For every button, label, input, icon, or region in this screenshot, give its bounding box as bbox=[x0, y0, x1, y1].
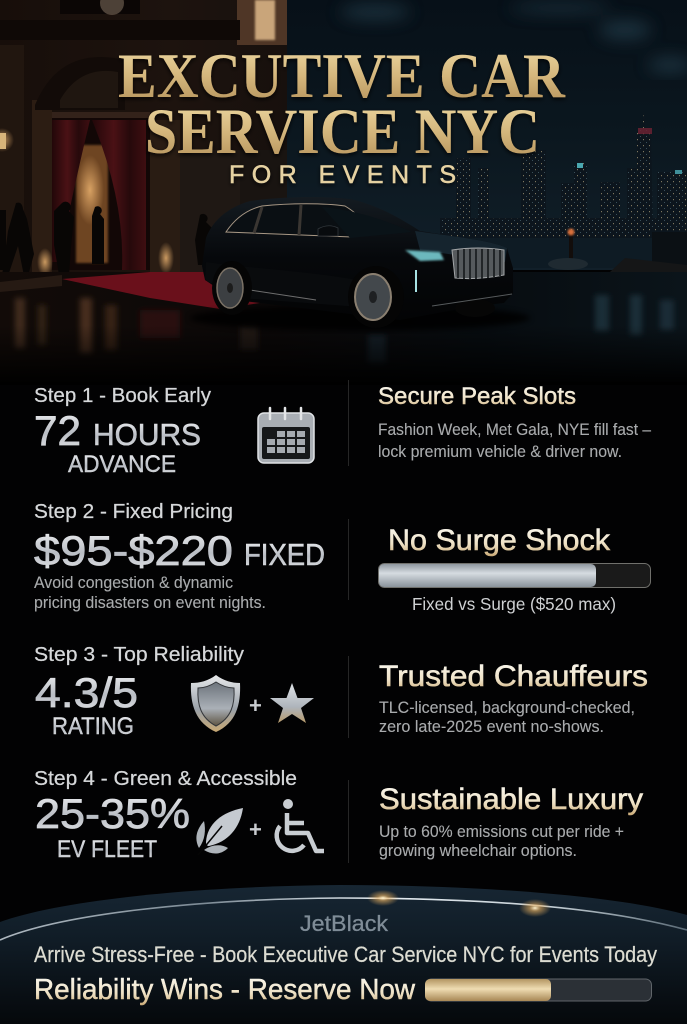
step 2 description bbox=[34, 574, 266, 612]
heading: trusted chauffeurs: Trusted Chauffeurs bbox=[379, 660, 648, 693]
stat: 4.3/5 rating: 4.3/5 bbox=[35, 669, 138, 716]
stat: EV fleet: EV FLEET bbox=[57, 836, 157, 863]
step 3 description: zero late-2025 event no-shows. bbox=[379, 718, 604, 736]
panel: step 3 bbox=[34, 643, 648, 740]
footer: car roof call to action bbox=[0, 885, 687, 1024]
plus sign: + bbox=[249, 817, 262, 842]
harbor water bbox=[470, 238, 687, 268]
step 2 description: pricing disasters on event nights. bbox=[34, 594, 266, 612]
red curtains and lit doorway bbox=[52, 118, 150, 270]
plus sign: + bbox=[249, 693, 262, 718]
icon: leaf bbox=[196, 808, 243, 855]
front bumper trim bbox=[432, 294, 512, 306]
step 2 heading: Step 2 - Fixed Pricing bbox=[34, 500, 233, 523]
stat: EV fleet: 25-35% bbox=[35, 790, 190, 837]
title line 3: FOR EVENTS bbox=[229, 161, 458, 189]
stat: 72 hours advance: ADVANCE bbox=[68, 451, 176, 478]
car roof bbox=[0, 885, 687, 1024]
wet street bbox=[0, 272, 687, 382]
title line 2: SERVICE NYC bbox=[145, 96, 540, 168]
stat: 4.3/5 rating bbox=[35, 669, 138, 740]
title bbox=[118, 41, 566, 189]
side mirror bbox=[318, 226, 338, 236]
title line 1: EXCUTIVE CAR bbox=[118, 41, 566, 111]
icon: star bbox=[270, 683, 314, 723]
step 3 description bbox=[379, 699, 635, 736]
red carpet bbox=[62, 272, 280, 309]
reserve line: Reliability Wins - Reserve Now bbox=[34, 974, 416, 1006]
step 4 heading: Step 4 - Green & Accessible bbox=[34, 767, 297, 790]
step 3 heading: Step 3 - Top Reliability bbox=[34, 643, 245, 666]
step 4 description: Up to 60% emissions cut per ride + bbox=[379, 823, 624, 841]
stat: fixed price range: $95-$220 bbox=[34, 527, 233, 574]
icon: shield bbox=[191, 675, 240, 732]
front wheel bbox=[348, 266, 404, 328]
bar: reserve progress bbox=[425, 979, 652, 1001]
guests bbox=[0, 202, 214, 276]
grille bbox=[452, 248, 504, 279]
step 2 description: Avoid congestion & dynamic bbox=[34, 574, 233, 592]
bar caption: Fixed vs Surge ($520 max) bbox=[412, 594, 616, 614]
step 1 description: Fashion Week, Met Gala, NYE fill fast – bbox=[378, 421, 652, 439]
stat: 72 hours advance bbox=[34, 407, 201, 478]
icon: wheelchair bbox=[277, 799, 324, 851]
heading: sustainable luxury: Sustainable Luxury bbox=[379, 783, 643, 816]
bar: fixed vs surge bbox=[378, 564, 650, 588]
heading: secure peak slots: Secure Peak Slots bbox=[378, 383, 576, 410]
step 1 description bbox=[378, 421, 652, 461]
stat: EV fleet bbox=[35, 790, 190, 863]
panel: step 2 bbox=[34, 500, 650, 614]
building facade bbox=[0, 0, 287, 280]
step 4 description: growing wheelchair options. bbox=[379, 842, 577, 860]
car windows bbox=[226, 204, 412, 300]
city skyline bbox=[440, 110, 687, 242]
step 1 heading: Step 1 - Book Early bbox=[34, 384, 212, 407]
street reflections bbox=[15, 295, 674, 363]
wall lamps and glow bbox=[0, 128, 174, 276]
hero photo: event venue and skyline bbox=[0, 0, 687, 385]
headlight bbox=[405, 250, 444, 292]
stat: fixed price range bbox=[34, 527, 325, 574]
stat: 72 hours advance: HOURS bbox=[93, 417, 201, 452]
black SUV bbox=[190, 197, 530, 331]
stat: fixed price range: FIXED bbox=[244, 537, 325, 572]
step 1 description: lock premium vehicle & driver now. bbox=[378, 443, 622, 461]
step 3 description: TLC-licensed, background-checked, bbox=[379, 699, 635, 717]
rear wheel bbox=[212, 261, 252, 315]
icon: calendar bbox=[258, 408, 314, 463]
stat: 4.3/5 rating: RATING bbox=[52, 713, 134, 740]
panel: step 1 bbox=[34, 380, 652, 478]
curb bbox=[0, 275, 62, 292]
night sky bbox=[285, 0, 687, 270]
car body bbox=[202, 197, 513, 320]
heading: no surge shock: No Surge Shock bbox=[388, 524, 611, 557]
harbor shapes bbox=[548, 228, 687, 280]
step 4 description bbox=[379, 823, 624, 860]
stat: 72 hours advance: 72 bbox=[34, 407, 81, 454]
far wheel bbox=[455, 299, 495, 317]
brand: JetBlack: JetBlack bbox=[300, 911, 389, 936]
panel: step 4 bbox=[34, 767, 643, 863]
fade to black bbox=[0, 325, 687, 385]
